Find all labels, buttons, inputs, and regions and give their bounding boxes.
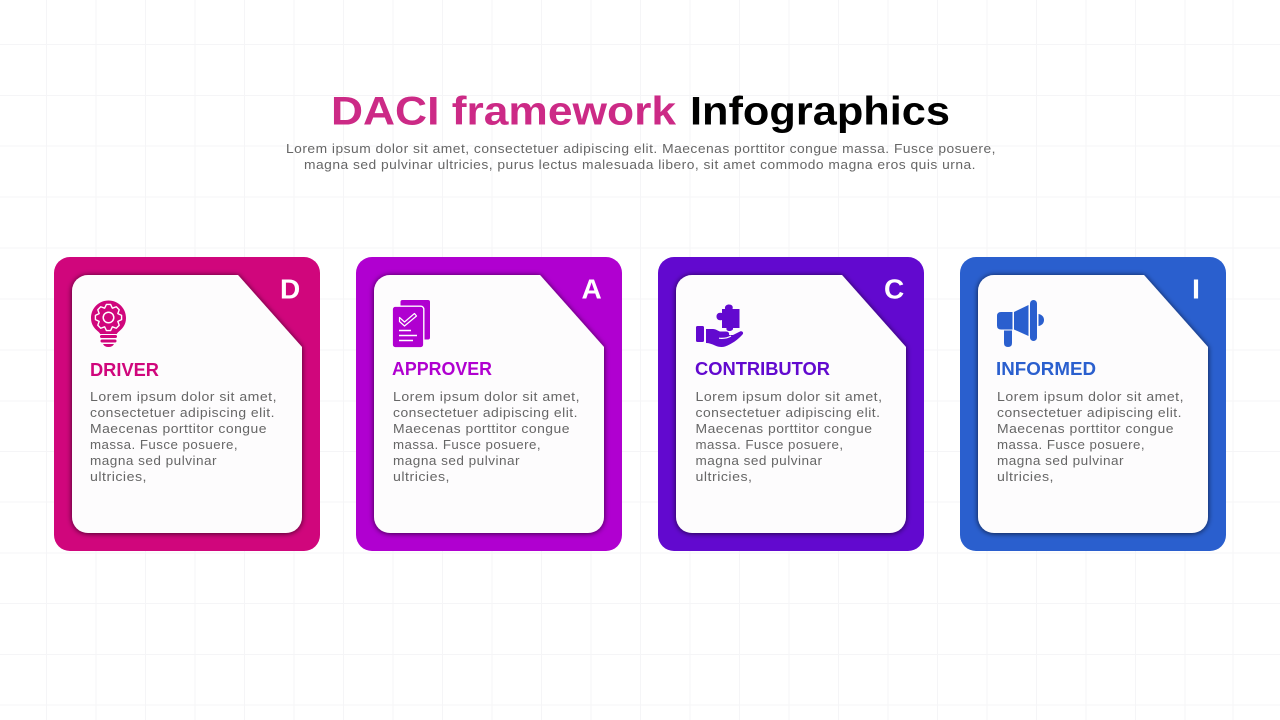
informed text: Maecenas porttitor congue [997,421,1174,436]
approver text: ultricies, [393,469,450,484]
contributor text [696,389,882,484]
driver inner card [72,275,302,533]
panel: contributor [658,257,924,551]
driver text: Lorem ipsum dolor sit amet, [90,389,277,404]
informed letter: I [1192,274,1200,304]
icon: megaphone [997,300,1044,347]
contributor text: magna sed pulvinar [696,453,823,468]
contributor text: Lorem ipsum dolor sit amet, [696,389,882,404]
informed heading: INFORMED [996,359,1096,379]
title: Infographics [690,90,950,134]
approver text [393,389,580,484]
approver inner card [374,275,604,533]
contributor text: Maecenas porttitor congue [696,421,872,436]
informed text: consectetuer adipiscing elit. [997,405,1182,420]
driver letter: D [280,274,300,304]
informed text: massa. Fusce posuere, [997,437,1145,452]
driver text [90,389,277,484]
icon: documents with check [392,300,430,348]
contributor letter: C [884,274,904,304]
subtitle: Lorem ipsum dolor sit amet, consectetuer adipiscing elit. Maecenas porttitor congue massa. Fusce posuere, [286,141,996,156]
driver text: magna sed pulvinar [90,453,217,468]
approver heading: APPROVER [392,359,492,379]
informed text: magna sed pulvinar [997,453,1124,468]
contributor heading: CONTRIBUTOR [695,359,830,379]
informed inner card [978,275,1208,533]
approver text: Lorem ipsum dolor sit amet, [393,389,580,404]
informed text: ultricies, [997,469,1054,484]
icon: hand with puzzle piece [696,304,743,347]
driver heading: DRIVER [90,360,159,380]
informed text [997,389,1184,484]
title: DACI framework [331,90,676,134]
panel: driver [54,257,320,551]
panel: informed [960,257,1226,551]
driver text: Maecenas porttitor congue [90,421,267,436]
contributor text: consectetuer adipiscing elit. [696,405,880,420]
icon: light bulb with gear [91,300,126,347]
title [331,90,950,134]
subtitle [286,141,996,172]
contributor text: ultricies, [696,469,752,484]
approver letter: A [582,274,602,304]
driver text: massa. Fusce posuere, [90,437,238,452]
approver text: magna sed pulvinar [393,453,520,468]
driver text: ultricies, [90,469,147,484]
driver text: consectetuer adipiscing elit. [90,405,275,420]
panel: approver [356,257,622,551]
approver text: Maecenas porttitor congue [393,421,570,436]
contributor text: massa. Fusce posuere, [696,437,844,452]
contributor inner card [676,275,906,533]
approver text: massa. Fusce posuere, [393,437,541,452]
subtitle: magna sed pulvinar ultricies, purus lectus malesuada libero, sit amet commodo magna eros quis urna. [304,157,976,172]
informed text: Lorem ipsum dolor sit amet, [997,389,1184,404]
approver text: consectetuer adipiscing elit. [393,405,578,420]
